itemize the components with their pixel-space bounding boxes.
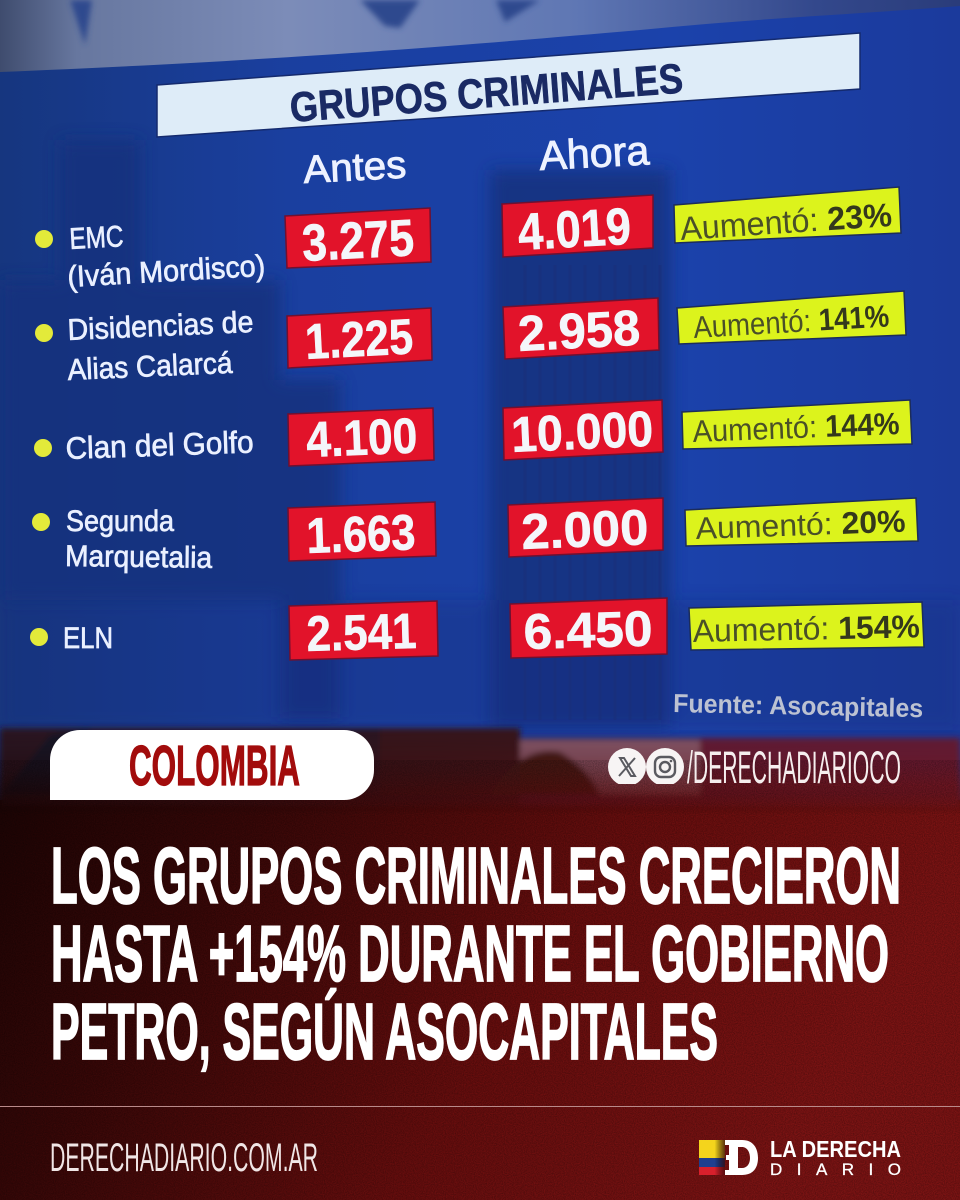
antes value: 1.225 [304, 308, 414, 370]
antes value: 2.541 [306, 603, 417, 662]
bullet [34, 439, 52, 457]
ahora value: 2.000 [520, 499, 649, 560]
wordmark: LA DERECHA [770, 1136, 901, 1162]
label: EMC [69, 220, 124, 256]
country tag [50, 730, 374, 800]
icon: Instagram [646, 748, 684, 786]
label: Segunda [66, 505, 174, 538]
headline [51, 831, 901, 1076]
footer website: DERECHADIARIO.COM.AR [50, 1136, 318, 1180]
row: ELN [30, 598, 924, 662]
background: blue TV screen photo [0, 0, 960, 800]
label [65, 505, 213, 575]
label: Clan del Golfo [65, 424, 254, 466]
label: Disidencias de [67, 306, 254, 347]
social handle [608, 748, 900, 784]
icon: X [608, 748, 646, 786]
label [67, 220, 266, 294]
logo [699, 1136, 901, 1179]
antes value: 1.663 [305, 504, 416, 564]
row: EMC [35, 187, 901, 294]
increase tag: Aumentó: 20% [695, 504, 906, 546]
bullet [32, 513, 50, 531]
ahora value: 6.450 [523, 601, 653, 660]
row: Disidencias de Alias Calarcá [35, 291, 906, 387]
label: Alias Calarcá [67, 347, 233, 387]
antes value: 4.100 [305, 408, 418, 468]
row: Segunda Marquetalia [32, 498, 918, 575]
ahora value: 4.019 [516, 198, 632, 262]
panel: red bottom background [0, 730, 960, 1200]
column heading: Ahora: Ahora [538, 127, 651, 179]
column heading: Antes: Antes [302, 144, 407, 192]
label [67, 306, 254, 387]
label: ELN [63, 622, 113, 655]
increase tag: Aumentó: 154% [692, 608, 920, 649]
antes value: 3.275 [301, 209, 415, 273]
ahora value: 10.000 [510, 401, 654, 463]
bullet [30, 628, 48, 646]
logo: DIARIO [770, 1160, 901, 1179]
label: Marquetalia [65, 540, 213, 575]
label: (Iván Mordisco) [67, 250, 266, 294]
row: Clan del Golfo [34, 400, 912, 468]
bullet [35, 324, 53, 342]
country tag: COLOMBIA [129, 734, 300, 798]
title banner [157, 33, 860, 137]
background: building photo fading to red [0, 728, 960, 808]
increase tag: Aumentó: 144% [692, 406, 900, 449]
title banner: GRUPOS CRIMINALES [288, 55, 685, 131]
icon: flag D [699, 1140, 758, 1175]
ahora value: 2.958 [517, 300, 641, 362]
source note: Fuente: Asocapitales [673, 688, 923, 723]
increase tag: Aumentó: 141% [692, 298, 890, 345]
increase tag: Aumentó: 23% [679, 196, 893, 247]
bullet [35, 230, 53, 248]
